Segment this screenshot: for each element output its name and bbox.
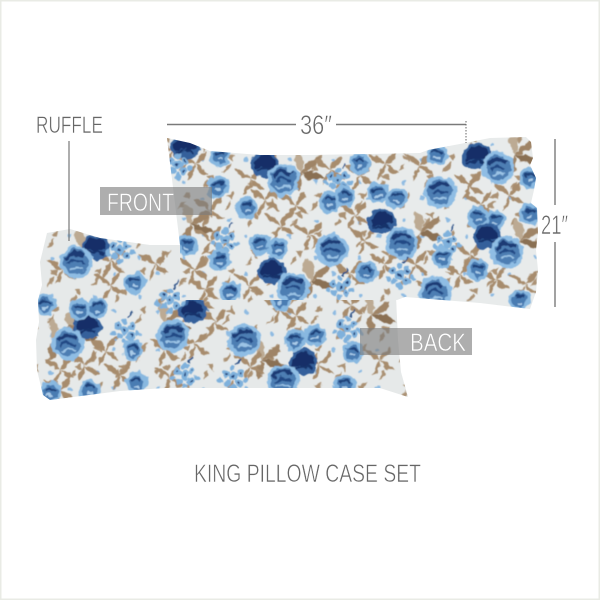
panel: front pillow — [167, 137, 538, 309]
title: KING PILLOW CASE SET — [194, 460, 421, 488]
label: FRONT: FRONT — [107, 189, 174, 217]
label: RUFFLE with leader line — [36, 112, 103, 241]
dimension: height 21 inches: 21″ — [541, 210, 568, 240]
front pillow floral print — [167, 137, 538, 308]
label: RUFFLE with leader line: RUFFLE — [36, 112, 103, 139]
label: BACK: BACK — [410, 329, 466, 357]
label: BACK — [360, 328, 472, 357]
back pillow floral print — [30, 225, 410, 405]
dimension: width 36 inches: 36″ — [300, 110, 332, 140]
panel: back pillow — [30, 225, 410, 405]
